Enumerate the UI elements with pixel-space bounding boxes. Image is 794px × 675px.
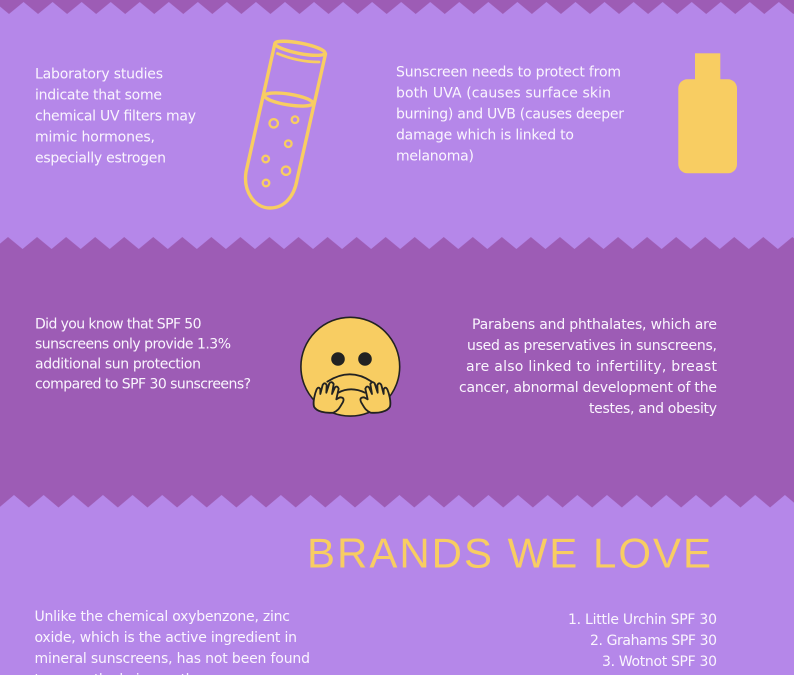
text block: zinc oxide (34, 609, 310, 675)
text block: parabens and phthalates: are also linked to infertility, breast (466, 359, 718, 375)
text block: SPF 50 fact: Did you know that SPF 50 (35, 316, 202, 332)
icon: sunscreen bottle (678, 53, 737, 173)
list: brands (568, 612, 717, 670)
text block: SPF 50 fact (35, 316, 251, 392)
text block: parabens and phthalates: cancer, abnormal development of the (459, 380, 717, 396)
icon: emoji face with hands over mouth (301, 317, 400, 416)
text block: UVA and UVB: damage which is linked to (396, 128, 574, 144)
list: brands: 3. Wotnot SPF 30 (602, 654, 717, 670)
text block: parabens and phthalates (459, 317, 718, 417)
text block: laboratory studies (35, 66, 196, 166)
text block: zinc oxide: Unlike the chemical oxybenzone, zinc (34, 609, 290, 625)
band: dark purple middle section (0, 237, 794, 508)
text block: laboratory studies: indicate that some (35, 88, 162, 104)
text block: parabens and phthalates: Parabens and phthalates, which are (472, 317, 717, 333)
text block: UVA and UVB: burning) and UVB (causes deeper (396, 106, 624, 122)
text block: laboratory studies: Laboratory studies (35, 66, 163, 82)
text block: laboratory studies: mimic hormones, (35, 130, 155, 146)
text block: zinc oxide: oxide, which is the active ingredient in (34, 630, 297, 646)
text block: UVA and UVB: both UVA (causes surface skin (396, 86, 611, 102)
text block: SPF 50 fact: compared to SPF 30 sunscreens? (35, 376, 251, 392)
text block: zinc oxide: mineral sunscreens, has not been found (34, 651, 310, 667)
text block: parabens and phthalates: used as preservatives in sunscreens, (467, 338, 717, 354)
text block: laboratory studies: especially estrogen (35, 150, 166, 166)
text block: parabens and phthalates: testes, and obesity (589, 401, 717, 417)
text block: laboratory studies: chemical UV filters may (35, 108, 196, 124)
text block: UVA and UVB: melanoma) (396, 148, 474, 164)
icon: test tube (246, 38, 326, 208)
list: brands: 2. Grahams SPF 30 (590, 633, 717, 649)
text block: UVA and UVB: Sunscreen needs to protect from (396, 64, 621, 80)
text block: UVA and UVB (396, 64, 624, 164)
heading: brands we love: BRANDS WE LOVE (307, 530, 711, 576)
text block: SPF 50 fact: sunscreens only provide 1.3% (35, 336, 231, 352)
top zigzag border (0, 0, 794, 15)
text block: SPF 50 fact: additional sun protection (35, 356, 201, 372)
list: brands: 1. Little Urchin SPF 30 (568, 612, 717, 628)
